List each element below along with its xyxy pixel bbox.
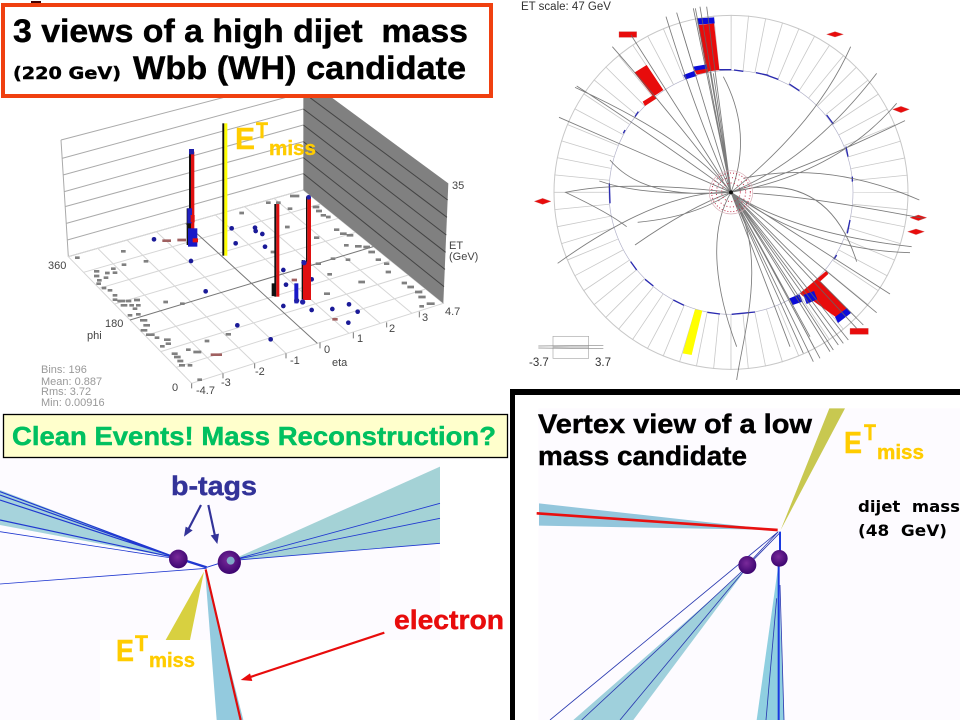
text: ET scale: ET scale: 47 GeV — [521, 1, 611, 13]
text: dijet mass — [858, 497, 960, 540]
axis labels: lego plot: -3 — [221, 377, 231, 389]
secondary vertices — [169, 550, 241, 574]
banner: clean events — [4, 414, 508, 458]
axis labels: lego plot: -1 — [290, 355, 300, 367]
stats box: Rms: 3.72 — [41, 386, 91, 398]
text: inset eta range: 3.7 — [595, 357, 611, 369]
missing ET cone — [781, 408, 845, 530]
arrows: b-tags — [184, 505, 219, 544]
electron cone — [205, 570, 243, 720]
label: ET miss, vertex view: E — [844, 425, 862, 460]
muon markers — [534, 32, 927, 334]
stats box: Min: 0.00916 — [41, 397, 105, 409]
axis labels: lego plot: 2 — [389, 323, 395, 335]
inner ring blue segments — [609, 70, 852, 314]
label: electron: electron — [394, 605, 504, 635]
heading: vertex view: Vertex view of a low — [538, 409, 813, 439]
reddish cells — [162, 240, 338, 355]
axis labels: lego plot: 35 — [452, 180, 464, 192]
jet tower: left — [187, 149, 198, 247]
back wall grid — [61, 77, 303, 257]
grey wall — [303, 77, 448, 303]
heading: vertex view — [538, 409, 813, 471]
title box: (220 GeV) — [13, 64, 121, 84]
axis labels: lego plot: phi — [87, 330, 102, 342]
vertex detector — [709, 171, 753, 214]
axis labels: lego plot: ET — [449, 240, 463, 252]
stats box — [41, 364, 105, 409]
stats box: Mean: 0.887 — [41, 376, 102, 388]
outer ring — [554, 15, 908, 369]
arrow: electron — [241, 633, 384, 681]
tracks — [0, 492, 440, 584]
label: ET miss on lego plot: T — [256, 118, 268, 143]
panel: 3D lego plot — [61, 77, 448, 388]
label: ET miss, high mass view: T — [135, 631, 149, 656]
axis labels: lego plot: -2 — [255, 366, 265, 378]
tracks — [558, 7, 923, 380]
title box: 3 views of a high dijet mass — [13, 13, 468, 49]
label: ET miss on lego plot: E — [235, 121, 255, 156]
inset eta box — [538, 336, 603, 358]
axis labels: lego plot: eta — [332, 357, 348, 369]
jet cones — [0, 467, 440, 561]
stats box: Bins: 196 — [41, 364, 87, 376]
mark above title — [31, 1, 41, 3]
label: ET miss, vertex view: T — [864, 420, 876, 445]
text: inset eta range — [529, 357, 611, 369]
axis labels: lego plot: 4.7 — [445, 306, 460, 318]
label: ET miss, high mass view: miss — [149, 650, 195, 672]
label: ET miss on lego plot: miss — [269, 138, 316, 160]
panel: high mass vertex view — [0, 458, 440, 720]
axis labels: lego plot — [48, 180, 478, 397]
heading: vertex view: mass candidate — [538, 441, 747, 471]
axis labels: lego plot: 360 — [48, 260, 66, 272]
label: ET miss, high mass view — [116, 631, 195, 672]
title box: Wbb (WH) candidate — [133, 50, 466, 86]
panel: end view tracker — [534, 7, 927, 380]
low energy cells — [75, 196, 435, 380]
text: dijet mass: dijet mass — [858, 497, 960, 516]
missing ET tower: yellow — [222, 123, 227, 256]
blue cells — [152, 225, 360, 342]
secondary vertices — [738, 550, 788, 574]
jet tower: centre — [272, 204, 279, 297]
missing ET cone — [166, 572, 204, 640]
jet cones — [550, 532, 784, 720]
label: ET miss, vertex view — [844, 420, 924, 464]
axis labels: lego plot: 0 — [324, 344, 330, 356]
axis labels: lego plot: 1 — [357, 333, 363, 345]
electron track — [206, 569, 241, 720]
panel: low mass vertex view — [510, 389, 960, 720]
axis labels: lego plot: 180 — [105, 318, 123, 330]
label: ET miss on lego plot — [235, 118, 316, 160]
axis labels: lego plot: -4.7 — [196, 385, 215, 397]
label: ET miss, high mass view: E — [116, 633, 134, 668]
axis labels: lego plot: 0 — [172, 382, 178, 394]
text: inset eta range: -3.7 — [529, 357, 549, 369]
axis labels: lego plot: (GeV) — [449, 251, 478, 263]
energy towers — [634, 17, 851, 355]
title box — [3, 5, 491, 96]
floor axis lines — [130, 223, 419, 388]
electron cone — [539, 503, 777, 530]
banner: clean events: Clean Events! Mass Reconstruction? — [12, 421, 496, 451]
floor grid — [68, 190, 443, 383]
label: b-tags: b-tags — [171, 471, 257, 501]
text: dijet mass: (48 GeV) — [858, 521, 947, 540]
label: ET miss, vertex view: miss — [877, 442, 924, 464]
black border — [510, 389, 960, 720]
electron track — [537, 513, 778, 530]
jet tower: right — [294, 195, 311, 305]
axis labels: lego plot: 3 — [422, 312, 428, 324]
